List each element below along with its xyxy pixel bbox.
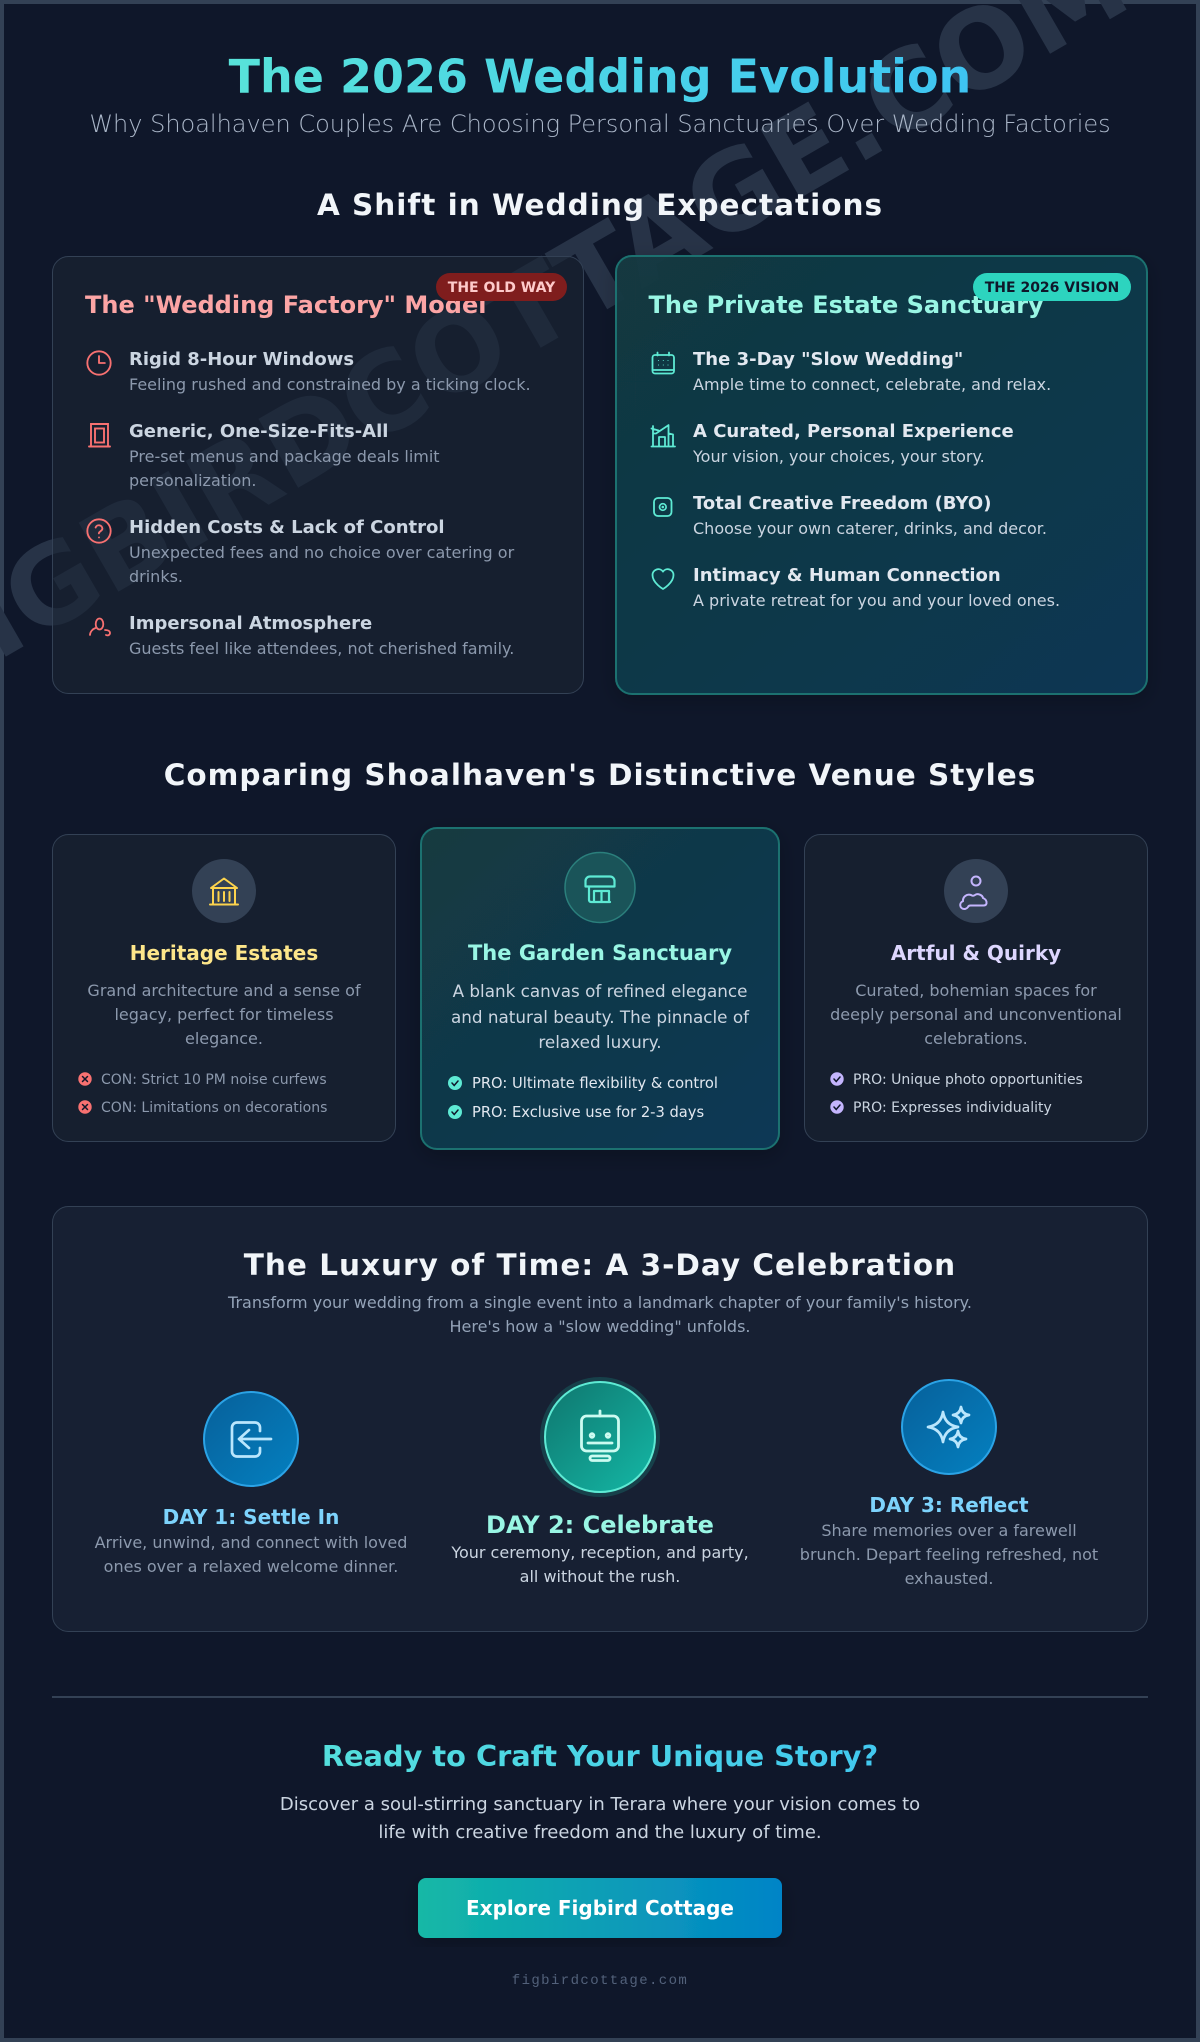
list item: impersonal: Impersonal Atmosphere [129, 613, 372, 634]
description: legacy, perfect for timeless [114, 1005, 334, 1024]
call to action heading: Ready to Craft Your Unique Story? [322, 1739, 878, 1773]
badge: the 2026 vision: THE 2026 VISION [985, 280, 1119, 296]
panel: wedding factory model [52, 256, 584, 694]
list item: hidden costs: Unexpected fees and no choice over catering or [129, 543, 515, 562]
list item: slow wedding: The 3-Day "Slow Wedding" [693, 349, 963, 370]
panel: artful and quirky [804, 834, 1148, 1142]
panel title: The Private Estate Sanctuary [648, 291, 1044, 319]
button: explore figbird cottage: Explore Figbird Cottage [466, 1896, 734, 1920]
list item: slow wedding [652, 349, 1051, 394]
list item: hidden costs: Hidden Costs & Lack of Control [129, 517, 445, 538]
panel: private estate sanctuary [616, 256, 1147, 694]
icon: person with cloud [944, 859, 1008, 923]
panel intro [227, 1293, 972, 1336]
pro: photo: PRO: Unique photo opportunities [853, 1072, 1083, 1088]
badge: the 2026 vision [973, 273, 1131, 301]
call to action text: life with creative freedom and the luxury of time. [378, 1822, 822, 1843]
description: Grand architecture and a sense of [87, 981, 361, 1000]
list item: intimacy: A private retreat for you and your loved ones. [693, 591, 1060, 610]
badge: the old way [436, 273, 567, 301]
panel: garden sanctuary [421, 828, 779, 1149]
list item: rigid windows [87, 349, 531, 394]
description: relaxed luxury. [538, 1032, 662, 1052]
description: Curated, bohemian spaces for [855, 981, 1097, 1000]
icon: celebration host [540, 1377, 660, 1497]
con: noise curfews: CON: Strict 10 PM noise curfews [101, 1072, 327, 1088]
icon: arrival [204, 1392, 298, 1486]
list item: generic [89, 421, 440, 490]
list item: curated: A Curated, Personal Experience [693, 421, 1014, 442]
panel intro: Transform your wedding from a single event into a landmark chapter of your family's history. [227, 1293, 972, 1312]
icon: question mark [87, 519, 111, 543]
list item: creative freedom [654, 493, 1047, 538]
list item: generic: Generic, One-Size-Fits-All [129, 421, 388, 442]
icon: house building [652, 425, 675, 446]
list item: hidden costs [87, 517, 515, 586]
icon: calendar [652, 352, 674, 374]
list item: creative freedom: Total Creative Freedom (BYO) [693, 493, 991, 514]
day description: all without the rush. [520, 1567, 680, 1586]
section heading: venue styles: Comparing Shoalhaven's Distinctive Venue Styles [164, 758, 1036, 792]
day 1 [95, 1392, 407, 1576]
subtitle: Why Shoalhaven Couples Are Choosing Personal Sanctuaries Over Wedding Factories [89, 110, 1111, 138]
day title: DAY 3: Reflect [869, 1493, 1029, 1517]
section heading: expectations: A Shift in Wedding Expectations [317, 188, 883, 222]
day title: DAY 2: Celebrate [486, 1511, 714, 1539]
day 2 [450, 1377, 749, 1586]
day title: DAY 1: Settle In [163, 1505, 339, 1529]
call to action text [280, 1794, 920, 1843]
icon: target square [654, 498, 672, 516]
pro: flexibility: PRO: Ultimate flexibility & control [472, 1075, 718, 1092]
icon: door frame [89, 424, 110, 446]
con: decorations: CON: Limitations on decorations [101, 1100, 327, 1116]
venue name: The Garden Sanctuary [468, 941, 732, 965]
list item: intimacy [652, 565, 1060, 610]
list item: hidden costs: drinks. [129, 567, 183, 586]
list item: impersonal [90, 613, 514, 658]
icon: sparkles [902, 1380, 996, 1474]
footer url: figbirdcottage.com [512, 1973, 688, 1989]
description: deeply personal and unconventional [830, 1005, 1122, 1024]
day description: brunch. Depart feeling refreshed, not [800, 1545, 1098, 1564]
list item: curated [652, 421, 1014, 466]
panel intro: Here's how a "slow wedding" unfolds. [449, 1317, 751, 1336]
venue name: Heritage Estates [130, 941, 318, 965]
list item: generic: personalization. [129, 471, 256, 490]
pro: exclusive use: PRO: Exclusive use for 2-3 days [472, 1104, 704, 1121]
icon: bank building [192, 859, 256, 923]
day description: Share memories over a farewell [821, 1521, 1077, 1540]
day description: Arrive, unwind, and connect with loved [95, 1533, 407, 1552]
venue name: Artful & Quirky [891, 941, 1061, 965]
day 3 [800, 1380, 1098, 1588]
panel title: The "Wedding Factory" Model [85, 291, 486, 319]
list item: rigid windows: Feeling rushed and constrained by a ticking clock. [129, 375, 531, 394]
day description [450, 1543, 749, 1586]
list item: curated: Your vision, your choices, your story. [692, 447, 985, 466]
pro: individuality: PRO: Expresses individuality [853, 1100, 1052, 1116]
panel heading: The Luxury of Time: A 3-Day Celebration [244, 1248, 956, 1282]
call to action text: Discover a soul-stirring sanctuary in Terara where your vision comes to [280, 1794, 920, 1815]
icon: clock [87, 351, 111, 375]
day description [800, 1521, 1098, 1588]
day description [95, 1533, 407, 1576]
button: explore figbird cottage [418, 1878, 782, 1938]
list item: slow wedding: Ample time to connect, celebrate, and relax. [693, 375, 1051, 394]
list item: impersonal: Guests feel like attendees, not cherished family. [129, 639, 514, 658]
icon: storefront [565, 852, 635, 922]
list item: intimacy: Intimacy & Human Connection [693, 565, 1001, 586]
description: celebrations. [924, 1029, 1028, 1048]
description: and natural beauty. The pinnacle of [451, 1007, 750, 1027]
panel: 3-day celebration [52, 1206, 1148, 1632]
list item: creative freedom: Choose your own caterer, drinks, and decor. [693, 519, 1047, 538]
title: The 2026 Wedding Evolution [229, 50, 971, 104]
description: A blank canvas of refined elegance [453, 981, 747, 1001]
badge: the old way: THE OLD WAY [448, 280, 556, 296]
list item: generic: Pre-set menus and package deals limit [129, 447, 440, 466]
icon: heart [652, 569, 674, 589]
description [451, 981, 750, 1052]
day description: Your ceremony, reception, and party, [450, 1543, 749, 1562]
icon: person [90, 618, 110, 635]
description [87, 981, 361, 1048]
description [830, 981, 1122, 1048]
day description: exhausted. [905, 1569, 993, 1588]
description: elegance. [185, 1029, 263, 1048]
day description: ones over a relaxed welcome dinner. [104, 1557, 398, 1576]
list item: rigid windows: Rigid 8-Hour Windows [129, 349, 354, 370]
panel: heritage estates [52, 834, 396, 1142]
